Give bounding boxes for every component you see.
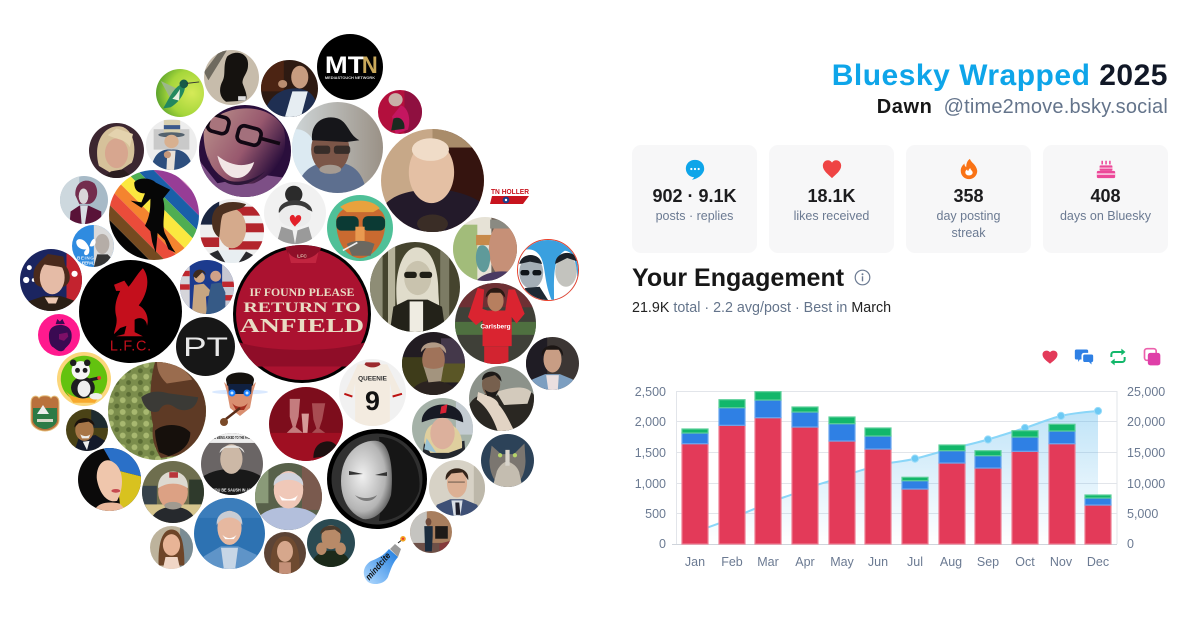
right axis labels: 5,000	[1127, 507, 1158, 521]
avatar: Return to Anfield shirt: LFC	[297, 253, 307, 259]
avatar: woman in maroon	[60, 176, 108, 224]
avatar: smiling man with glasses	[199, 105, 291, 197]
avatar: man with blue blazer	[526, 337, 579, 390]
month labels: Dec	[1087, 555, 1109, 569]
icon: info	[854, 269, 871, 286]
avatar: Return to Anfield shirt: ANFIELD	[240, 315, 364, 337]
legend icon: quotes	[1142, 347, 1162, 367]
avatar: PT logo: PT	[183, 331, 228, 362]
avatar: rainbow silhouette	[109, 170, 199, 260]
avatar: blonde in sunglasses black and white	[370, 242, 460, 332]
subtitle: name and handle: Dawn @time2move.bsky.social	[877, 96, 1168, 118]
legend icon: likes	[1041, 348, 1059, 366]
avatar: man with sunglasses and foliage	[108, 362, 206, 460]
avatar: man in hoodie	[469, 366, 534, 431]
title: Bluesky Wrapped 2025	[832, 59, 1168, 92]
month labels: Feb	[721, 555, 743, 569]
stat label: streak	[951, 226, 986, 240]
avatar: footballer in red: Carlsberg	[480, 323, 511, 330]
avatar: MTN network logo: MT	[325, 52, 365, 79]
left axis labels: 1,000	[635, 477, 666, 491]
avatar: George Carlin meme	[201, 433, 263, 495]
avatar: MTN network logo	[317, 34, 383, 100]
stat label: days on Bluesky	[1060, 209, 1151, 223]
avatar: woman in LFC beanie	[412, 398, 473, 459]
month labels: May	[830, 555, 855, 569]
avatar: young woman	[150, 526, 193, 569]
avatar cluster	[20, 34, 579, 584]
avatar: MTN network logo: MEDIASTOUCH NETWORK	[325, 76, 375, 80]
avatar: woman with Ukraine flag	[78, 448, 141, 511]
avatar: woman in pink	[378, 90, 422, 134]
avatar: smiling man in dark	[66, 409, 108, 451]
icon: flame	[958, 158, 980, 180]
avatar: Being Liberal butterfly: LIBERAL	[80, 260, 95, 265]
left axis labels: 2,500	[635, 385, 666, 399]
month labels: Aug	[940, 555, 962, 569]
month labels: Nov	[1050, 555, 1073, 569]
chart: monthly engagement	[620, 375, 1180, 575]
stat card: day posting streak	[906, 145, 1031, 253]
avatar: LFC liverbird	[79, 260, 182, 363]
month labels: Apr	[795, 555, 815, 569]
right axis labels: 0	[1127, 537, 1134, 551]
avatar: man in suit	[261, 60, 318, 117]
avatar: bald man	[381, 129, 484, 232]
heading: your engagement: Your Engagement	[632, 264, 844, 292]
avatar: footballer in red	[455, 283, 536, 364]
avatar: Mark Hamill	[307, 519, 355, 567]
stat label	[914, 208, 1023, 242]
area and line: cumulative engagement	[695, 407, 1102, 544]
avatar: brunette woman	[264, 532, 306, 574]
month labels: Jun	[868, 555, 888, 569]
avatar: mindcite light bulb: mindcite	[363, 551, 393, 582]
right axis labels: 20,000	[1127, 415, 1165, 429]
avatar: Premier League lion	[38, 314, 80, 356]
stat value: 358	[953, 186, 984, 206]
stacked bars: likes, replies, reposts per month	[682, 392, 1111, 544]
month labels: Mar	[757, 555, 779, 569]
right axis labels: 25,000	[1127, 385, 1165, 399]
stat label: likes received	[794, 209, 869, 223]
avatar: man in suit with tie	[429, 460, 485, 516]
left axis labels: 0	[659, 537, 666, 551]
avatar: woman black and white	[327, 429, 427, 529]
avatar: sunglasses pop art	[327, 195, 393, 261]
avatar: red trophy room	[269, 387, 343, 461]
avatar: young man and flag	[200, 199, 264, 263]
right axis labels: 10,000	[1127, 477, 1165, 491]
avatar: mindcite light bulb	[362, 536, 408, 588]
avatar: TN Holler logo: TN HOLLER	[491, 189, 529, 196]
avatar: PT logo	[176, 317, 235, 376]
avatar: Being Liberal butterfly	[72, 225, 114, 267]
avatar: Return to Anfield shirt	[233, 245, 371, 383]
icon: speech bubble	[684, 158, 706, 180]
stat label: posts · replies	[656, 209, 733, 223]
avatar: MTN network logo: N	[362, 52, 378, 79]
avatar: man in black cap	[292, 102, 383, 193]
avatar: two men with sunglasses	[517, 239, 579, 301]
right axis labels	[1127, 385, 1165, 551]
avatar: Queenie 9 shirt: 9	[365, 386, 380, 416]
month labels	[685, 555, 1109, 569]
avatar: man in blue suit	[194, 498, 265, 569]
legend	[1040, 347, 1162, 367]
icon: birthday cake	[1095, 158, 1117, 180]
right axis labels: 15,000	[1127, 446, 1165, 460]
avatar: black dog	[204, 50, 259, 105]
avatar: woman in a room	[410, 511, 452, 553]
stat value: 18.1K	[807, 186, 856, 206]
legend icon: reposts	[1108, 347, 1128, 367]
avatar: panda	[57, 352, 111, 406]
left axis labels: 500	[645, 507, 666, 521]
avatar: woman with US flag	[20, 249, 82, 311]
month labels: Oct	[1015, 555, 1035, 569]
avatar: TN Holler logo	[490, 189, 529, 204]
avatar: Queenie 9 shirt	[339, 359, 406, 426]
avatar: George Takei	[255, 463, 322, 530]
avatar: man in white beanie	[142, 461, 204, 523]
avatar: hummingbird	[156, 69, 204, 117]
left axis labels	[635, 385, 666, 551]
avatar: LFC liverbird: L.F.C.	[110, 339, 151, 355]
left axis labels: 2,000	[635, 415, 666, 429]
avatar: Return to Anfield shirt: RETURN TO	[243, 299, 361, 316]
avatar: grey cat	[481, 434, 534, 487]
avatar: bearded man at night	[402, 332, 465, 395]
month labels: Sep	[977, 555, 999, 569]
stat card: likes received	[769, 145, 894, 253]
avatar: Return to Anfield shirt: IF FOUND PLEASE	[250, 287, 354, 299]
avatar: Being Liberal butterfly: BEING	[77, 255, 94, 260]
avatar: devil with pipe and glowing eyes	[212, 372, 268, 426]
month labels: Jan	[685, 555, 705, 569]
avatar: Queenie 9 shirt: QUEENIE	[358, 375, 387, 382]
avatar: mountain badge	[30, 395, 60, 432]
avatar: girl with heart	[264, 182, 326, 244]
avatar: man with parrot	[453, 217, 517, 281]
stat label: day posting	[937, 209, 1000, 223]
stat value: 408	[1090, 186, 1121, 206]
avatar: blonde woman	[89, 123, 144, 178]
avatar: Uncle Sam	[146, 119, 197, 170]
stat card: posts and replies	[632, 145, 757, 253]
left axis labels: 1,500	[635, 446, 666, 460]
stat value: 902 · 9.1K	[652, 186, 737, 206]
avatar: George Carlin meme: YOU BE SAUSH IN AN	[212, 487, 252, 493]
engagement summary: 21.9K total · 2.2 avg/post · Best in March	[632, 300, 891, 316]
stat card: days on Bluesky	[1043, 145, 1168, 253]
avatar: couple shaking hands	[180, 260, 234, 314]
icon: heart	[821, 158, 843, 180]
legend icon: replies	[1074, 347, 1094, 367]
month labels: Jul	[907, 555, 923, 569]
